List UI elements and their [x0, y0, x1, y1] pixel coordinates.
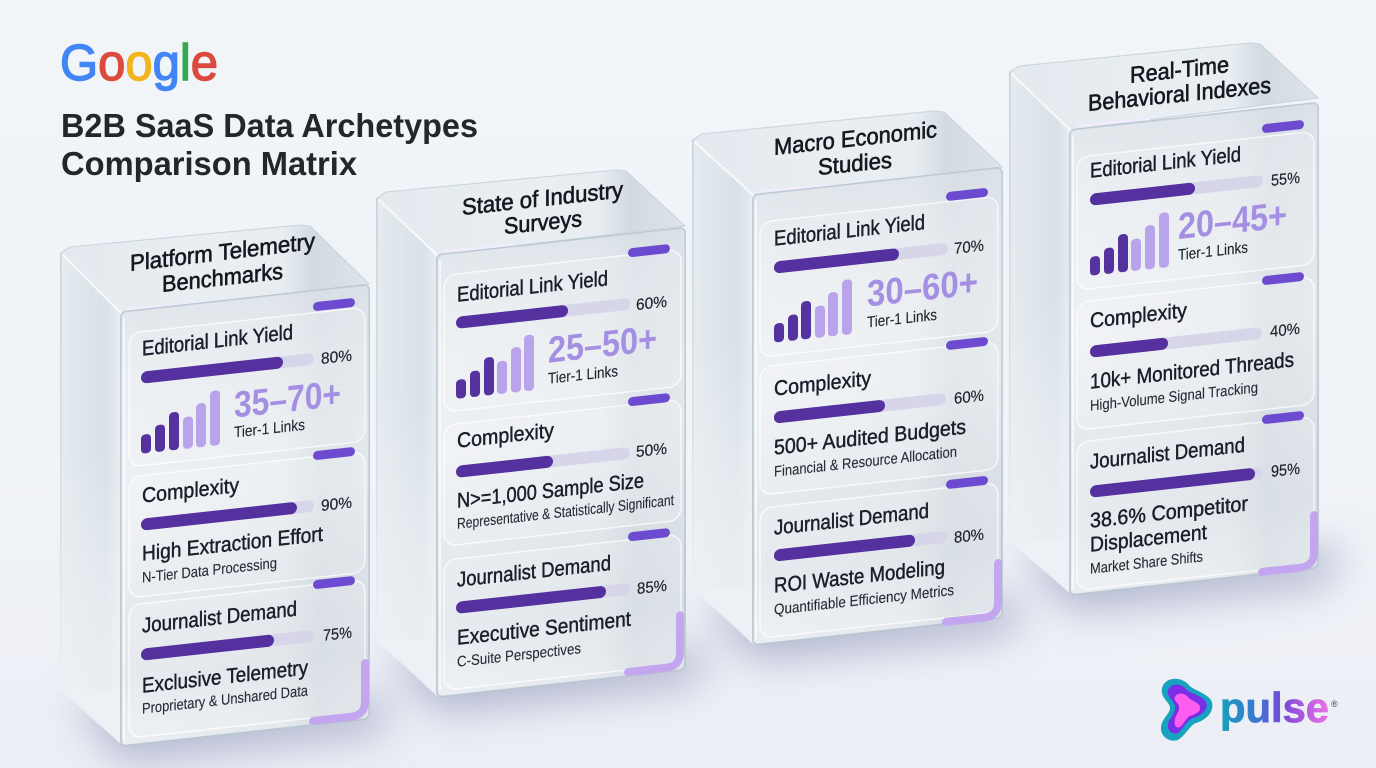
card: Editorial Link Yield: Editorial Link Yield: [457, 267, 608, 307]
main title: B2B SaaS Data Archetypes: [61, 107, 478, 144]
card: Complexity: [760, 336, 998, 495]
Google logo: Google: [60, 34, 218, 91]
card: Complexity: 10k+ Monitored Threads: [1090, 348, 1294, 394]
pulse logo: ®: [1331, 699, 1338, 709]
panel: Macro Economic Studies: [692, 111, 1002, 645]
heading: Real-Time Behavioral Indexes: Behavioral Indexes: [1088, 72, 1271, 116]
progress bar 85%: [456, 577, 667, 618]
pulse logo: pulse: [1220, 684, 1329, 731]
progress bar 80%: [774, 526, 984, 567]
heading: Real-Time Behavioral Indexes: Real-Time: [1130, 51, 1229, 88]
progress bar 70%: [774, 237, 984, 278]
card: Editorial Link Yield: 20–45+: [1178, 193, 1287, 247]
progress bar 75%: [141, 624, 352, 665]
card: Complexity: N-Tier Data Processing: [142, 555, 277, 587]
card: Complexity: N>=1,000 Sample Size: [457, 469, 644, 513]
card: Journalist Demand: Journalist Demand: [142, 598, 297, 638]
icon: pulse blob: [1161, 679, 1212, 741]
progress bar 80%: 80%: [321, 347, 352, 368]
card: Journalist Demand: [129, 575, 365, 741]
progress bar 85%: 85%: [637, 577, 667, 598]
card: Editorial Link Yield: Editorial Link Yield: [142, 321, 293, 361]
progress bar 80%: 80%: [954, 526, 984, 547]
progress bar 95%: 95%: [1271, 460, 1300, 481]
card: Complexity: High-Volume Signal Tracking: [1090, 379, 1258, 415]
progress bar 90%: [141, 494, 352, 535]
card: Complexity: [129, 446, 365, 598]
card: Complexity: Financial & Resource Allocation: [774, 444, 957, 481]
progress bar 40%: [1090, 320, 1300, 361]
card: Complexity: Complexity: [457, 419, 554, 453]
progress bar 60%: 60%: [954, 387, 984, 408]
progress bar 95%: [1090, 460, 1300, 501]
progress bar 75%: 75%: [323, 624, 352, 645]
panel: Platform Telemetry Benchmarks: [60, 225, 369, 746]
card: Complexity: Representative & Statistically Significant: [457, 492, 675, 533]
card: Journalist Demand: Proprietary & Unshared Data: [142, 682, 309, 718]
card: Journalist Demand: Quantifiable Efficiency Metrics: [774, 582, 954, 619]
card: Journalist Demand: Market Share Shifts: [1090, 548, 1203, 578]
card: Journalist Demand: Executive Sentiment: [457, 608, 631, 650]
card: Complexity: [1077, 271, 1314, 430]
card: Editorial Link Yield: 30–60+: [867, 260, 978, 314]
card: Editorial Link Yield: Tier-1 Links: [1178, 239, 1248, 264]
card: Complexity: Complexity: [774, 367, 871, 401]
card: Journalist Demand: [444, 527, 681, 692]
heading: Platform Telemetry Benchmarks: [130, 228, 315, 297]
card: Journalist Demand: ROI Waste Modeling: [774, 556, 945, 598]
heading: Macro Economic Studies: Macro Economic: [774, 116, 937, 160]
card: Editorial Link Yield: Tier-1 Links: [548, 363, 618, 388]
pulse logo: [1161, 679, 1338, 741]
panel: Real-Time Behavioral Indexes: [1008, 43, 1318, 595]
card: Editorial Link Yield: [444, 243, 681, 412]
panel: State of Industry Surveys: [376, 170, 685, 697]
card: Journalist Demand: Journalist Demand: [457, 552, 611, 592]
card: Editorial Link Yield: [760, 187, 998, 357]
heading: State of Industry Surveys: [462, 176, 623, 239]
card: Complexity: [444, 392, 681, 546]
card: Complexity: Complexity: [142, 474, 239, 508]
progress bar 40%: 40%: [1270, 320, 1300, 341]
progress bar 50%: [456, 440, 667, 481]
card: Journalist Demand: Journalist Demand: [774, 500, 929, 540]
card: Journalist Demand: Journalist Demand: [1090, 434, 1245, 474]
icon: bar chart: [774, 279, 852, 343]
card: Editorial Link Yield: 25–50+: [548, 317, 657, 371]
card: Editorial Link Yield: [129, 297, 365, 467]
card: Editorial Link Yield: [1077, 119, 1314, 290]
card: Editorial Link Yield: Tier-1 Links: [867, 307, 937, 331]
card: Editorial Link Yield: 35–70+: [234, 372, 341, 426]
card: Journalist Demand: 38.6% Competitor: [1090, 492, 1248, 533]
progress bar 55%: 55%: [1271, 169, 1300, 190]
progress bar 60%: 60%: [636, 293, 667, 314]
progress bar 70%: 70%: [954, 237, 984, 258]
icon: bar chart: [456, 334, 534, 399]
card: Complexity: Complexity: [1090, 299, 1187, 333]
heading: State of Industry Surveys: State of Industry: [462, 176, 623, 220]
card: Editorial Link Yield: Tier-1 Links: [234, 417, 305, 442]
main title: [61, 107, 478, 182]
card: Complexity: 500+ Audited Budgets: [774, 416, 966, 460]
card: Complexity: High Extraction Effort: [142, 523, 323, 566]
card: Journalist Demand: Exclusive Telemetry: [142, 656, 308, 698]
heading: Platform Telemetry Benchmarks: Benchmarks: [162, 258, 283, 297]
progress bar 90%: 90%: [321, 494, 352, 515]
card: Editorial Link Yield: Editorial Link Yield: [1090, 143, 1241, 183]
icon: bar chart: [141, 390, 220, 454]
heading: State of Industry Surveys: Surveys: [504, 205, 582, 239]
progress bar 55%: [1090, 169, 1300, 210]
card: Journalist Demand: Displacement: [1090, 521, 1207, 557]
heading: Macro Economic Studies: [774, 116, 937, 180]
card: Journalist Demand: [1077, 410, 1314, 592]
card: Journalist Demand: [760, 475, 998, 642]
block shadows: [72, 550, 1348, 762]
card: Editorial Link Yield: Editorial Link Yield: [774, 211, 925, 251]
progress bar 60%: [456, 293, 667, 334]
heading: Platform Telemetry Benchmarks: Platform Telemetry: [130, 228, 315, 276]
icon: bar chart: [1090, 212, 1169, 276]
main title: Comparison Matrix: [61, 145, 358, 182]
heading: Macro Economic Studies: Studies: [818, 147, 892, 180]
heading: Real-Time Behavioral Indexes: [1088, 51, 1271, 116]
progress bar 60%: [774, 387, 984, 428]
progress bar 80%: [141, 347, 352, 388]
card: Journalist Demand: C-Suite Perspectives: [457, 640, 581, 671]
progress bar 50%: 50%: [636, 440, 667, 461]
